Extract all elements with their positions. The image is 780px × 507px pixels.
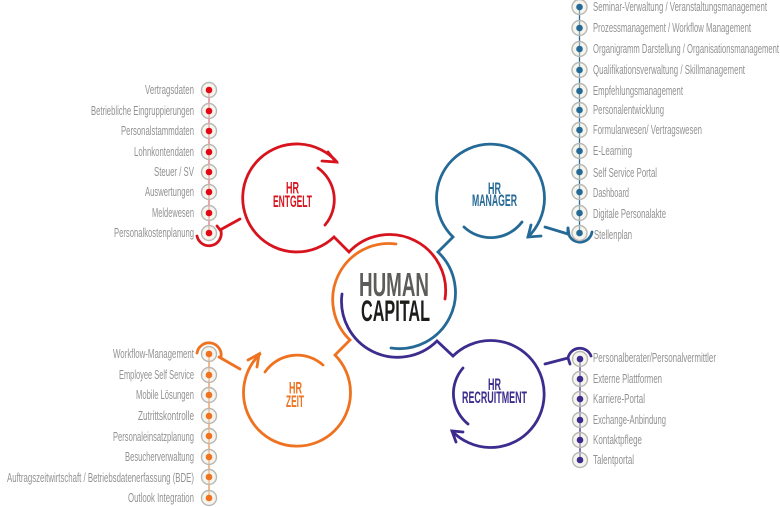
item: Personalentwicklung: Personalentwicklung [593, 103, 664, 117]
connector: Manager to list [545, 227, 592, 242]
item: Personalberater [572, 351, 716, 366]
item: Digitale Personalakte: Digitale Personalakte [593, 207, 666, 221]
item: Externe Plattformen: Externe Plattformen [593, 372, 662, 386]
item: Lohnkontendaten: Lohnkontendaten [134, 145, 194, 159]
item: Formularwesen: Formularwesen/ Vertragswesen [593, 123, 702, 137]
heading: HR Zeit: ZEIT [286, 393, 304, 411]
item: Personalkostenplanung: Personalkostenplanung [114, 226, 194, 240]
hub title: CAPITAL [361, 295, 430, 328]
item: Betriebliche Eingruppierungen: Betriebliche Eingruppierungen [91, 104, 194, 118]
item: Empfehlungsmanagement: Empfehlungsmanagement [593, 84, 683, 98]
item: Outlook Integration: Outlook Integration [128, 491, 194, 505]
hub title [359, 266, 430, 328]
ring: Entgelt with arrow [243, 144, 446, 299]
item: Mobile Lösungen: Mobile Lösungen [136, 388, 194, 402]
item: Personalstammdaten: Personalstammdaten [121, 124, 194, 138]
connector: Zeit to list [197, 343, 240, 369]
item: Kontaktpflege [572, 432, 642, 448]
heading: HR Recruitment: HR [488, 376, 501, 394]
item: Formularwesen [572, 122, 702, 138]
heading: HR Manager [472, 180, 517, 210]
hub title: HUMAN [359, 266, 429, 303]
heading: HR Recruitment: RECRUITMENT [462, 389, 527, 407]
item: Meldewesen: Meldewesen [152, 206, 194, 220]
item: Exchange-Anbindung: Exchange-Anbindung [593, 413, 666, 427]
item: Dashboard: Dashboard [593, 186, 629, 200]
heading: HR Manager: HR [488, 180, 501, 198]
item: Steuer / SV: Steuer / SV [154, 165, 194, 179]
item: Stellenplan [572, 226, 632, 242]
list: Manager items [572, 0, 779, 242]
item: Empfehlungsmanagement [572, 84, 683, 98]
ring: Zeit with arrow [243, 244, 396, 446]
connector: Entgelt to list [197, 219, 240, 246]
item: Talentportal [572, 452, 634, 468]
ring: Recruitment with arrow [342, 294, 544, 448]
item: Qualifikationsverwaltung [572, 62, 745, 78]
item: Kontaktpflege: Kontaktpflege [593, 433, 642, 447]
item: E-Learning: E-Learning [593, 144, 632, 158]
item: Personalentwicklung [572, 102, 664, 118]
heading: HR Entgelt [273, 180, 312, 211]
heading: HR Zeit [286, 380, 304, 411]
panel: HR Manager [391, 0, 779, 349]
list: Recruitment items [572, 351, 716, 468]
item: Karriere-Portal: Karriere-Portal [593, 392, 645, 406]
item: Self Service Portal: Self Service Portal [593, 166, 657, 180]
item: Employee Self Service: Employee Self Service [119, 368, 194, 382]
panel: HR Zeit [7, 244, 396, 506]
item: Self Service Portal [572, 164, 657, 180]
item: E-Learning [572, 144, 632, 158]
heading: HR Entgelt: HR [286, 180, 299, 198]
item: Talentportal: Talentportal [593, 453, 634, 467]
item: Exchange-Anbindung [572, 412, 666, 428]
heading: HR Entgelt: ENTGELT [273, 193, 312, 211]
panel: HR Recruitment [342, 294, 716, 468]
item: Stellenplan: Stellenplan [594, 228, 632, 242]
item: Vertragsdaten: Vertragsdaten [145, 83, 194, 97]
item: Auftragszeitwirtschaft: Auftragszeitwirtschaft / Betriebsdatenerfassung (BDE) [7, 471, 194, 485]
list: Zeit items [7, 346, 216, 506]
connector: Recruitment to list [545, 348, 591, 364]
list: Entgelt items [91, 82, 216, 240]
item: Karriere-Portal [572, 392, 645, 406]
item: Externe Plattformen [572, 372, 662, 386]
item: Besucherverwaltung: Besucherverwaltung [125, 450, 194, 464]
item: Auftragszeitwirtschaft [7, 470, 216, 485]
central hub: Human Capital [359, 266, 430, 328]
item: Auswertungen: Auswertungen [145, 185, 194, 199]
item: Workflow-Management: Workflow-Management [113, 347, 194, 361]
item: Zutrittskontrolle: Zutrittskontrolle [138, 409, 194, 423]
heading: HR Manager: MANAGER [472, 192, 517, 210]
item: Personaleinsatzplanung: Personaleinsatzplanung [113, 430, 194, 444]
item: Dashboard [572, 184, 629, 200]
panel: HR Entgelt [91, 82, 446, 299]
item: Digitale Personalakte [572, 206, 666, 221]
heading: HR Zeit: HR [289, 380, 302, 398]
heading: HR Recruitment [462, 376, 527, 407]
ring: Manager with arrow [391, 144, 545, 349]
